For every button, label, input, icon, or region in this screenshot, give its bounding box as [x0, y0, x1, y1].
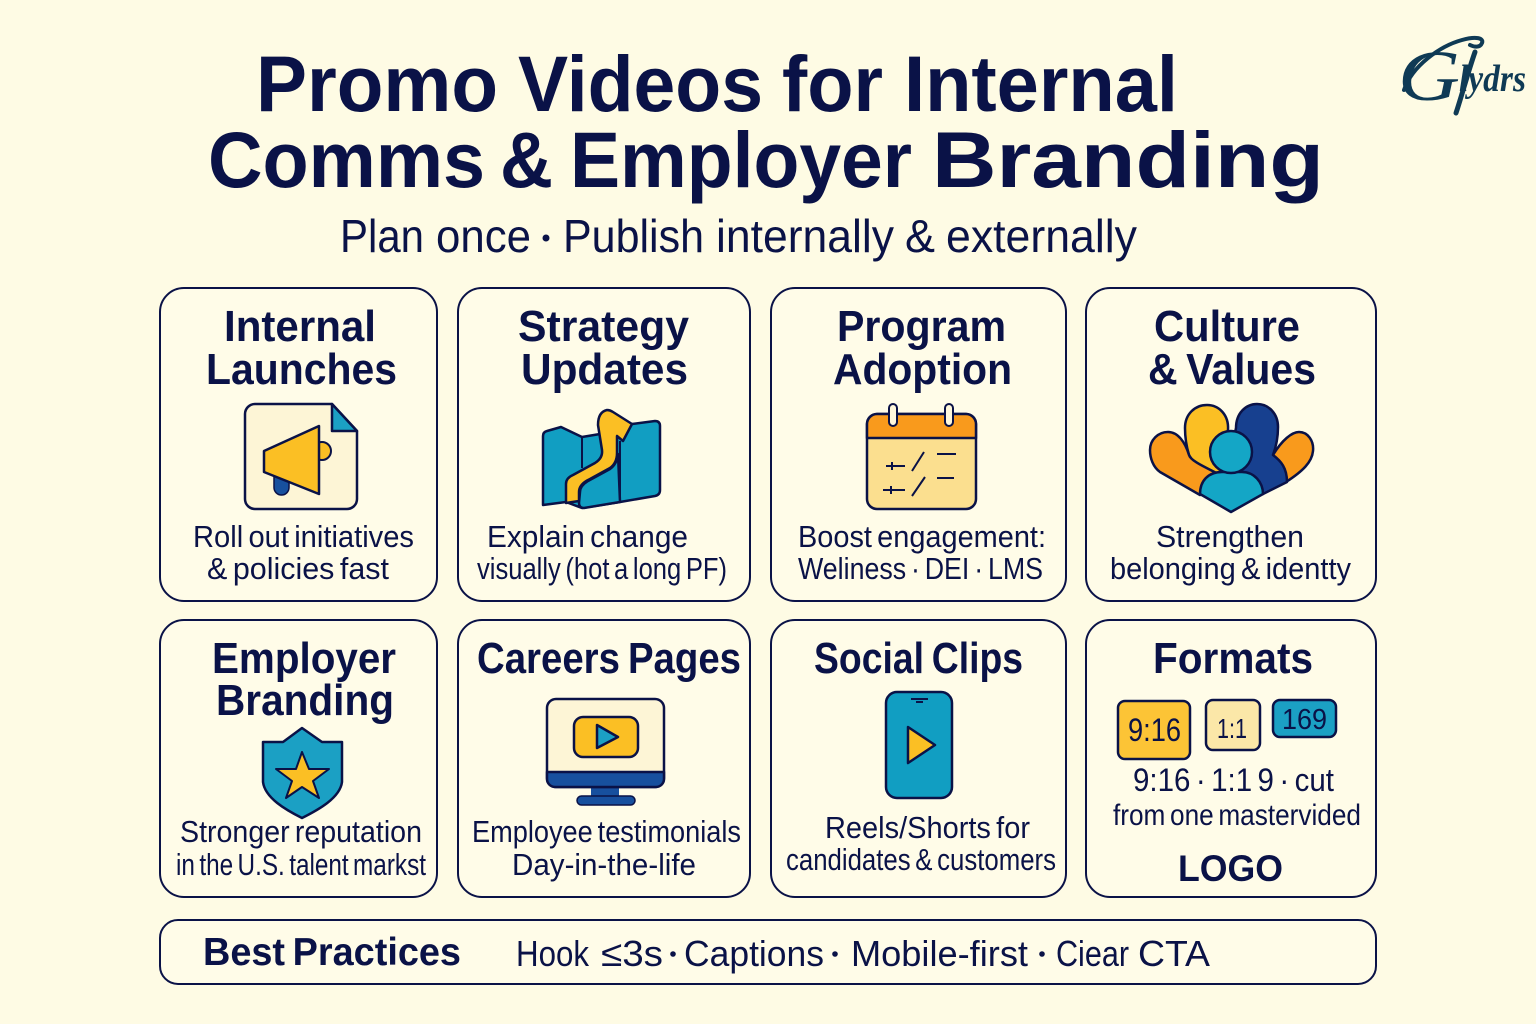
list: practices	[516, 933, 1211, 974]
heading: employer branding: Branding	[216, 677, 394, 725]
subtitle: Plan	[340, 210, 424, 262]
heading: program adoption: Program	[837, 303, 1006, 351]
heading: careers pages: Careers Pages	[477, 635, 741, 683]
panel: culture and values	[1086, 288, 1376, 601]
heading: culture and values	[1148, 303, 1316, 394]
description: formats	[1113, 762, 1361, 832]
description: careers pages	[472, 814, 741, 882]
description: program adoption: Boost engagement:	[798, 519, 1046, 554]
subtitle: externally	[946, 210, 1137, 262]
description: social clips: Reels/Shorts for	[825, 810, 1030, 845]
list: practices: Mobile-first	[851, 933, 1028, 974]
description: internal launches: & policies fast	[207, 551, 389, 586]
list: practices: Hook	[516, 933, 590, 974]
title: for	[782, 39, 883, 128]
description: social clips: candidates & customers	[786, 842, 1056, 877]
heading: culture and values: & Values	[1148, 346, 1316, 394]
panel: employer branding	[160, 620, 437, 897]
description: social clips	[786, 810, 1056, 877]
heading: employer branding: Employer	[212, 635, 396, 683]
logo placeholder: LOGO	[1178, 848, 1283, 889]
subtitle: internally	[716, 210, 894, 262]
heading: strategy updates	[518, 303, 689, 394]
subtitle	[340, 210, 1137, 262]
description: program adoption	[798, 519, 1046, 586]
logo: lydrs	[1459, 58, 1526, 100]
panel: social clips	[771, 620, 1066, 897]
description: strategy updates: visually (hot a long PF)	[477, 551, 727, 586]
heading: strategy updates: Strategy	[518, 303, 689, 351]
list: practices: CTA	[1138, 933, 1211, 974]
description: careers pages: Day-in-the-life	[512, 847, 696, 882]
icon: calendar	[867, 404, 976, 509]
icon: map with route arrow	[543, 410, 660, 508]
list: practices: ≤3s	[601, 933, 663, 974]
description: formats: from one mastervided	[1113, 799, 1361, 832]
panel: formats	[1086, 620, 1376, 897]
subtitle: once	[436, 210, 531, 262]
panel: internal launches	[160, 288, 437, 601]
heading: internal launches: Launches	[206, 346, 397, 394]
title: Employer	[570, 115, 912, 204]
title	[208, 39, 1324, 204]
subtitle: Publish	[563, 210, 704, 262]
description: internal launches	[193, 519, 414, 586]
heading: program adoption: Adoption	[833, 346, 1012, 394]
icon: megaphone on document	[245, 404, 357, 509]
icon: group of people	[1150, 404, 1313, 512]
logo: G	[1398, 36, 1460, 116]
description: culture and values: Strengthen	[1156, 519, 1304, 554]
title: Promo	[256, 39, 498, 128]
description: strategy updates: Explain change	[487, 519, 688, 554]
badge: 16:9	[1273, 700, 1336, 737]
heading: internal launches	[206, 303, 397, 394]
heading: internal launches: Internal	[224, 303, 376, 351]
description: program adoption: Weliness · DEI · LMS	[798, 551, 1043, 586]
heading: culture and values: Culture	[1154, 303, 1300, 351]
subtitle: &	[905, 210, 935, 262]
panel: program adoption	[771, 288, 1066, 601]
description: employer branding	[176, 814, 426, 882]
logo	[1398, 36, 1526, 116]
icon: shield with star	[263, 728, 342, 818]
description: careers pages: Employee testimonials	[472, 814, 741, 849]
heading: social clips: Social Clips	[814, 635, 1023, 683]
title: Internal	[904, 39, 1178, 128]
badge: 16:9: 169	[1282, 704, 1327, 736]
description: employer branding: Stronger reputation	[180, 814, 422, 849]
description: internal launches: Roll out initiatives	[193, 519, 414, 554]
panel: careers pages	[458, 620, 750, 897]
title: Branding	[932, 115, 1324, 204]
description: culture and values	[1110, 519, 1351, 586]
description: employer branding: in the U.S. talent markst	[176, 847, 426, 882]
list: practices: Ciear	[1056, 933, 1129, 974]
heading: employer branding	[212, 635, 396, 725]
heading: strategy updates: Updates	[521, 346, 688, 394]
panel: best practices	[160, 920, 1376, 984]
heading: program adoption	[833, 303, 1012, 394]
heading: best practices: Best Practices	[203, 931, 461, 974]
icon: monitor with play button	[547, 699, 664, 805]
badge: 1:1	[1206, 700, 1260, 750]
badge: 9:16	[1118, 701, 1190, 759]
title: Videos	[518, 39, 763, 128]
heading: formats: Formats	[1153, 635, 1313, 683]
description: formats: 9:16 · 1:1 9 · cut	[1133, 762, 1334, 798]
badge: 9:16: 9:16	[1128, 712, 1181, 748]
title: Comms	[208, 115, 485, 204]
badge: 1:1: 1:1	[1217, 713, 1247, 744]
panel: strategy updates	[458, 288, 750, 601]
list: practices: Captions	[684, 933, 824, 974]
icon: phone with play button	[886, 692, 952, 798]
description: strategy updates	[477, 519, 727, 586]
title: &	[500, 115, 553, 204]
description: culture and values: belonging & identty	[1110, 551, 1351, 586]
